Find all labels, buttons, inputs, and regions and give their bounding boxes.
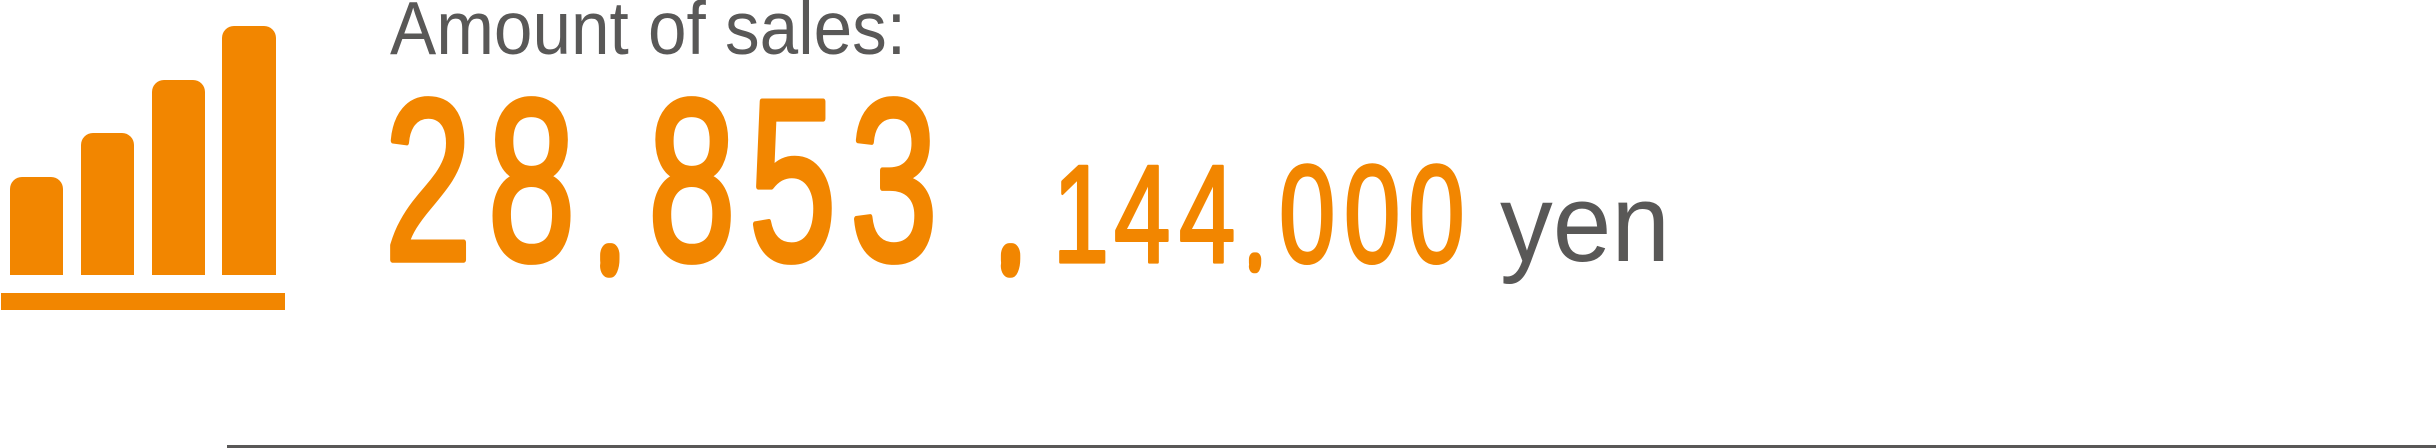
figure: remaining digits: ,: [1252, 235, 1258, 269]
figure: millions part: ,: [606, 220, 614, 271]
bar 1: [10, 177, 63, 275]
bar 4: [222, 26, 276, 275]
bar 2: [81, 133, 134, 275]
figure: remaining digits: 144: [1053, 136, 1235, 292]
figure: millions part: 853: [648, 52, 938, 309]
figure: millions part: 28: [384, 52, 575, 309]
chart baseline: [1, 293, 285, 310]
figure: millions part: ,: [1006, 220, 1015, 271]
bottom rule: [227, 445, 2436, 448]
unit: yen: yen: [1500, 162, 1670, 285]
icon: rising bar chart: [1, 26, 285, 310]
figure: remaining digits: 000: [1279, 136, 1465, 292]
bar 3: [152, 80, 205, 275]
